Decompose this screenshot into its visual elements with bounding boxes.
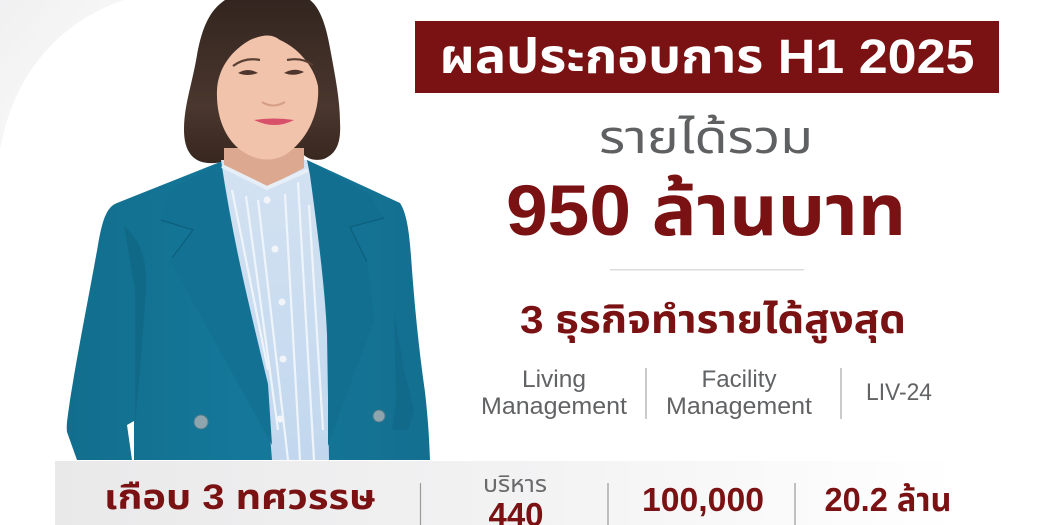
eyebrows and eyes — [233, 59, 313, 66]
blazer — [67, 160, 430, 460]
nose — [262, 102, 285, 106]
neck — [224, 148, 304, 187]
stat: 100,000: 100,000 — [642, 481, 764, 518]
portrait: woman in teal blazer — [67, 0, 430, 460]
business: living management: Management — [481, 393, 627, 420]
hair — [184, 0, 340, 163]
stat: 20.2 million: 20.2 ล้าน — [824, 481, 952, 518]
shirt stripes — [232, 182, 323, 460]
stat: decades: เกือบ 3 ทศวรรษ — [104, 478, 376, 517]
divider — [610, 269, 804, 270]
business: facility management: Facility — [702, 366, 776, 393]
business list — [481, 366, 932, 420]
total revenue value: 950 ล้านบาท — [506, 172, 906, 251]
face — [217, 36, 318, 159]
collar band — [222, 166, 308, 188]
stat: projects managed: บริหาร — [483, 471, 547, 497]
shirt buttons — [264, 196, 286, 422]
left lapel — [161, 162, 272, 445]
gap at arm — [127, 421, 134, 460]
title banner: ผลประกอบการ H1 2025 — [440, 31, 974, 84]
business dividers — [646, 368, 841, 419]
jacket buttons — [194, 410, 385, 429]
right lapel — [307, 160, 384, 446]
business: living management — [481, 366, 627, 420]
mouth — [254, 118, 294, 125]
strip background — [55, 461, 955, 525]
business: LIV-24: LIV-24 — [866, 379, 932, 406]
stat dividers — [420, 483, 795, 525]
lapel edges — [161, 218, 384, 262]
business: facility management: Management — [666, 393, 812, 420]
stats strip — [55, 461, 955, 525]
shirt — [221, 160, 329, 460]
top businesses heading: 3 ธุรกิจทำรายได้สูงสุด — [520, 299, 906, 343]
background arc — [0, 0, 124, 150]
sleeve shadows — [124, 225, 146, 425]
total revenue label: รายได้รวม — [599, 111, 813, 163]
title banner — [415, 21, 999, 93]
business: living management: Living — [522, 366, 586, 393]
business: facility management — [666, 366, 812, 420]
